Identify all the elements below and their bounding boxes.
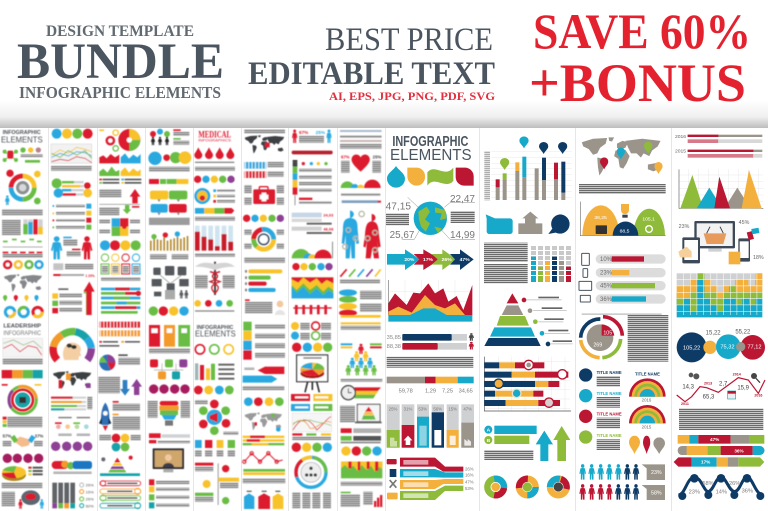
- mini charts bottom: [341, 492, 382, 507]
- heading: infographic elements medium: ELEMENTS: [195, 329, 236, 338]
- ellipse stack: [339, 289, 382, 316]
- humps chart with trophy: 88,5: [620, 228, 630, 234]
- navy wave labels: 26%: [729, 481, 740, 487]
- navy wave labels: 58%: [702, 481, 714, 487]
- handshake: 37%: [35, 434, 43, 439]
- icon: team network: [3, 147, 43, 163]
- mosaic axis: [677, 315, 762, 317]
- navy wave labels: 14%: [716, 490, 727, 496]
- head arc ring: [53, 332, 91, 360]
- icon row: [292, 443, 332, 452]
- bubble values: 105,22: [683, 345, 700, 351]
- clock ring: [244, 229, 285, 263]
- devices with basket: 23%: [679, 224, 690, 230]
- chart: triangles: [679, 169, 763, 208]
- people male and female: [51, 236, 92, 259]
- horizontal bars: [51, 397, 92, 410]
- chart: square grid: [531, 246, 571, 282]
- title block: design template bundle: INFOGRAPHIC ELEMENTS: [19, 83, 221, 102]
- donut row: [5, 307, 42, 317]
- title block: save 60% bonus: [529, 3, 751, 113]
- title block: design template bundle: [17, 23, 224, 102]
- dark columns and rings: 15%: [86, 489, 94, 494]
- column chart: [195, 226, 235, 257]
- icon row magenta: [149, 384, 190, 394]
- pie: third: [550, 479, 567, 495]
- icon row: [292, 343, 332, 352]
- chart: flow bands: 47%: [465, 479, 474, 484]
- chart: flow bands: 53%: [465, 486, 474, 491]
- line chart: [3, 338, 43, 364]
- chart: flow bands: [387, 458, 474, 500]
- section: infographic elements panel upper: [386, 134, 572, 315]
- line chart with years: 14,3: [682, 384, 695, 390]
- chart: six percent columns: 31%: [404, 407, 412, 412]
- title block: best price editable text: AI, EPS, JPG, PNG, PDF, SVG: [329, 91, 495, 103]
- square list: [149, 479, 189, 508]
- rainbow 2015: 2015: [642, 424, 652, 429]
- human bodies: [342, 211, 381, 258]
- flame circle: [194, 188, 235, 204]
- arrows up and down: [99, 189, 140, 215]
- section: left columns lower: [2, 322, 190, 509]
- chart: segmented bar: 7,25: [442, 389, 453, 395]
- title block: save 60% bonus: SAVE 60%: [533, 3, 751, 59]
- percent callouts: [642, 464, 665, 500]
- title list with pins: TITLE NAME: [597, 370, 622, 375]
- globe with values: 47,15: [386, 201, 411, 212]
- line chart with years: 2011: [681, 402, 689, 406]
- year bars 2016 2015: 2015: [675, 149, 686, 155]
- bubble values: 77,12: [747, 345, 761, 351]
- globe with values: 14,99: [450, 230, 475, 241]
- line chart with years: 65,3: [703, 395, 715, 401]
- dark columns and rings: 25%: [86, 483, 94, 488]
- section: right panels upper: [579, 134, 764, 315]
- stat people top: [292, 129, 332, 143]
- progress pills with devices: 10%: [600, 257, 613, 263]
- line chart with years: 2,7: [719, 381, 728, 387]
- stacked spikes: [341, 462, 382, 486]
- line chart with years: 2013: [704, 381, 712, 385]
- section: medical columns upper: [194, 129, 382, 316]
- rainbow 2016: 2016: [642, 398, 652, 403]
- a b bars: A: [487, 428, 491, 434]
- icon row magenta: [3, 454, 43, 463]
- rocket: [99, 401, 140, 431]
- title block: design template bundle: BUNDLE: [17, 34, 224, 90]
- line chart waves: [292, 413, 332, 440]
- section: infographic elements panel lower: [387, 315, 573, 500]
- chart: square progress rows: 35,85: [387, 335, 401, 341]
- chart: segmented bar: 34,65: [459, 389, 473, 395]
- speech head: [2, 490, 44, 509]
- text columns: [292, 492, 331, 508]
- title list with pins: [579, 368, 622, 450]
- chart: square progress rows: 88,38: [387, 344, 401, 350]
- chart: column rows: [150, 231, 188, 259]
- up arrows: [536, 426, 570, 461]
- people bar: [149, 433, 190, 443]
- pictogram rows: 24,03: [323, 213, 334, 218]
- lightbulb: [148, 401, 190, 426]
- bubble values: 75,32: [720, 345, 734, 351]
- icon row: [292, 263, 333, 270]
- progress pills: [52, 178, 92, 198]
- progress pills with devices: 45%: [600, 284, 613, 290]
- stat people top: 25%: [316, 130, 326, 135]
- bubble circles: [148, 151, 191, 172]
- chart: segmented bar: 59,78: [399, 389, 413, 395]
- monitor stat: [53, 263, 95, 278]
- globe with values: [386, 194, 475, 241]
- chart: segmented ring: 105: [603, 330, 612, 336]
- chart: six percent columns: 15%: [448, 407, 457, 412]
- dark columns and rings: 50%: [86, 503, 94, 508]
- heading: infographic elements small: INFOGRAPHIC: [3, 130, 41, 136]
- pie: [103, 354, 140, 367]
- chart: square progress rows: [387, 333, 474, 350]
- chart: six percent columns: [387, 404, 474, 448]
- stacked bar 17%: [674, 457, 764, 467]
- dark columns and rings: 25%: [86, 497, 94, 502]
- dark map: [244, 129, 285, 154]
- pie: first: [487, 479, 504, 495]
- bubble values: 15,22: [706, 330, 721, 336]
- caduceus: [195, 262, 235, 295]
- chart: six percent columns: 47%: [463, 407, 472, 412]
- stacked icon boxes: [243, 322, 285, 360]
- people rows: [99, 322, 140, 347]
- column chart grey: [195, 363, 234, 380]
- humps chart with trophy: [580, 202, 666, 236]
- bar dot lists: [340, 130, 382, 149]
- easel with pie: [297, 355, 328, 392]
- icon row bottom: [149, 306, 189, 316]
- pictogram rows: 48,08: [323, 226, 334, 231]
- chart: segmented ring: [581, 317, 622, 358]
- small caption: [582, 313, 662, 315]
- navy wave labels: [678, 474, 764, 500]
- pie: second: [519, 479, 536, 495]
- title list with pins: TITLE NAME: [597, 391, 622, 396]
- icon: navy speech bubble: [548, 214, 570, 234]
- green yellow band: [243, 469, 285, 483]
- arrow chain: [387, 249, 474, 270]
- business network icons: [152, 266, 189, 299]
- heading: medical: INFOGRAPHICS: [198, 139, 232, 143]
- legend list: [3, 417, 42, 427]
- chart: column pairs with pins: [484, 136, 572, 200]
- title block: save 60% bonus: +BONUS: [529, 53, 746, 113]
- bubble values: [677, 330, 765, 362]
- title list with pins: TITLE NAME: [597, 412, 622, 417]
- node row: [55, 417, 90, 436]
- heading: medical: [198, 130, 232, 143]
- monitor stat: 1 20%: [85, 274, 95, 278]
- people pyramid: [341, 344, 382, 382]
- text block: [2, 209, 43, 215]
- shape: teal drop: [387, 166, 405, 188]
- devices with basket: 18%: [753, 255, 764, 261]
- chart: gantt bars: [484, 357, 571, 411]
- small round icons with text: [291, 322, 331, 340]
- dark columns and rings: [52, 483, 94, 508]
- navy wave labels: 36%: [742, 489, 753, 495]
- pyramid: [100, 456, 140, 476]
- percent callouts: 23%: [651, 470, 662, 476]
- syringe: [293, 160, 332, 205]
- chart: flow bands: 26%: [465, 467, 474, 472]
- arrows teal and purple: [98, 377, 142, 396]
- title block: best price editable text: [248, 22, 495, 103]
- shape: green wave: [427, 168, 453, 186]
- year bars 2016 2015: [675, 134, 762, 158]
- text block: [628, 315, 668, 362]
- globe with values: 25,67: [390, 230, 415, 241]
- text block two paragraphs: [484, 243, 528, 283]
- puzzle: [99, 218, 140, 236]
- chain: [292, 151, 333, 154]
- label tags: [291, 394, 332, 411]
- table with arrow: [52, 282, 95, 315]
- gauges: [195, 345, 233, 354]
- leadership ring: [2, 384, 41, 414]
- pyramid top tiers: [502, 293, 567, 315]
- heading: infographic elements large: ELEMENTS: [390, 147, 472, 164]
- chart: brain ring: [5, 170, 41, 205]
- segmented bar: [149, 179, 188, 184]
- three cards: [149, 325, 190, 353]
- year bars 2016 2015: 2016: [675, 134, 686, 140]
- heading: infographic elements small: ELEMENTS: [1, 134, 43, 144]
- globe with values: 22,47: [450, 194, 475, 205]
- heading: infographic elements large: INFOGRAPHIC: [392, 134, 469, 150]
- chart: mountain area: [388, 280, 472, 315]
- title block: best price editable text: EDITABLE TEXT: [248, 56, 495, 92]
- chart: six percent columns: 56%: [433, 407, 442, 412]
- heading: infographic elements large: [390, 134, 472, 164]
- arrow chain: 17%: [423, 257, 434, 263]
- icon row kit: [243, 215, 284, 222]
- vertical timeline: [195, 463, 239, 505]
- heartbeat people: [293, 305, 332, 314]
- people pictogram: [579, 464, 639, 500]
- four circles: [99, 434, 141, 451]
- icon row: [244, 397, 284, 406]
- flow chart: [150, 359, 187, 379]
- line chart with years: 2014: [733, 373, 742, 377]
- stacked bar 36%: [678, 446, 764, 455]
- humps chart with trophy: 105,1: [642, 217, 655, 223]
- heading: infographic elements medium: [195, 325, 236, 338]
- red network: [243, 452, 283, 463]
- grey map: [245, 413, 282, 432]
- text block: [579, 184, 666, 194]
- map with highlights: [53, 371, 91, 389]
- org ring: [296, 457, 326, 487]
- icon: taupe house: [518, 212, 542, 234]
- icon: teal speech box: [486, 214, 513, 234]
- handshake: 57%: [3, 434, 11, 439]
- title block: best price editable text: BEST PRICE: [325, 22, 493, 58]
- text block: [484, 450, 533, 460]
- header shadow band: [0, 100, 768, 128]
- heart: [341, 155, 381, 173]
- chart: segmented bar: [387, 377, 474, 395]
- progress pills with devices: [579, 253, 666, 304]
- chart: six percent columns: 53%: [418, 407, 427, 412]
- stacked area chart: [292, 277, 333, 298]
- arrow chain: 26%: [442, 257, 452, 263]
- data table: [243, 436, 284, 445]
- stacked bar 47%: [678, 435, 764, 444]
- stacked bar 17%: 17%: [701, 460, 711, 465]
- heart: 25%: [373, 155, 381, 160]
- chart: segmented ring: 269: [593, 342, 602, 348]
- arrow meters: [243, 367, 284, 390]
- percent callouts: 58%: [651, 490, 662, 496]
- monitor: [153, 448, 184, 472]
- outlined cards: [101, 254, 140, 281]
- team bubbles: [150, 129, 189, 145]
- arrow chain: 20%: [404, 257, 415, 263]
- chart: mountain area base: [388, 315, 472, 322]
- shape: red blob: [456, 168, 474, 186]
- rainbow 2016: [629, 371, 666, 403]
- icon strip: [2, 370, 43, 378]
- doctor: [245, 299, 285, 315]
- line chart with years: 15,9: [737, 386, 750, 392]
- line chart with years: 2016: [754, 394, 762, 398]
- line chart with years: [677, 373, 765, 406]
- icon row: [3, 260, 44, 269]
- progress pills with devices: 36%: [600, 297, 613, 303]
- heading: medical: MEDICAL: [198, 130, 231, 140]
- heading: leadership infographic: INFOGRAPHIC: [3, 331, 42, 337]
- speech boxes: [150, 191, 187, 215]
- heading: leadership infographic: [3, 323, 42, 337]
- label rows: [341, 428, 381, 443]
- devices with basket: 45%: [739, 220, 750, 226]
- heading: infographic elements small: [1, 130, 43, 144]
- small cards: [244, 491, 283, 509]
- grey text band: [149, 218, 190, 225]
- pill bars: [245, 269, 282, 292]
- map with pins: [582, 137, 663, 176]
- chart: mosaic heatmap: [677, 273, 762, 315]
- title block: design template bundle: DESIGN TEMPLATE: [46, 23, 194, 40]
- icon row: [194, 386, 234, 394]
- icon row: second column: [52, 129, 93, 139]
- section: medical columns lower: [194, 315, 382, 509]
- section: left columns upper: [1, 129, 191, 317]
- humps: [292, 242, 333, 258]
- humps chart with trophy: 36,25: [594, 215, 607, 221]
- clock bands: [341, 386, 381, 400]
- title list with pins: TITLE NAME: [597, 433, 622, 438]
- 3d pie: [2, 466, 43, 488]
- blood drops: [194, 147, 235, 171]
- diagonal arrows: [340, 269, 381, 283]
- progress pills with devices: 23%: [600, 271, 613, 277]
- humps small: [341, 180, 381, 188]
- first aid kit: [244, 185, 284, 205]
- stat people top: 67%: [299, 130, 309, 135]
- bubble values: 55,22: [735, 330, 751, 336]
- chart: segmented bar: 1,29: [425, 389, 436, 395]
- icon list: [52, 204, 91, 230]
- navy wave labels: 23%: [689, 490, 700, 496]
- chart: coloured columns: [2, 219, 43, 235]
- heading: leadership infographic: LEADERSHIP: [3, 323, 41, 329]
- stacked horizontal bars: [101, 288, 141, 314]
- pipes: [52, 461, 92, 474]
- rainbow 2015: [629, 405, 666, 429]
- a b bars: [484, 426, 537, 444]
- megaphone hub: [195, 400, 238, 435]
- arrow chain: 47%: [460, 257, 470, 263]
- chart: flow bands: 16%: [465, 473, 474, 478]
- a b bars: B: [487, 438, 491, 444]
- text block: [387, 357, 473, 368]
- timeline: [3, 239, 43, 258]
- pyramid lower tiers: [484, 316, 573, 346]
- colour pill: [195, 208, 235, 221]
- laptop pyramid: [340, 404, 382, 423]
- teardrop pins: [629, 436, 665, 454]
- stacked bar 36%: 36%: [734, 448, 745, 453]
- pin row medical: [194, 300, 234, 312]
- range slider: [341, 193, 381, 203]
- icon row purple: [51, 442, 92, 451]
- shape: amber blob: [407, 168, 425, 186]
- stacked bar 47%: 47%: [710, 437, 720, 442]
- chart: six percent columns: 25%: [389, 407, 397, 412]
- people rows blue red: [244, 162, 284, 178]
- heart: 67%: [341, 155, 350, 160]
- icon row: [341, 446, 382, 456]
- handshake: [3, 434, 43, 447]
- area charts: [99, 153, 141, 184]
- outlined list: [100, 481, 141, 509]
- map with pins: [3, 274, 42, 302]
- text block: [679, 408, 763, 430]
- icon row medical: [194, 176, 235, 183]
- section: right panels lower: [579, 315, 765, 500]
- rainbow 2016: TITLE NAME: [635, 371, 660, 376]
- list top: [341, 315, 382, 348]
- icon row third column: [100, 240, 141, 250]
- gear and pie: [99, 129, 140, 151]
- heading: infographic elements medium: INFOGRAPHIC: [197, 325, 233, 331]
- square cards: [195, 440, 235, 457]
- column dividers: [48, 128, 672, 511]
- line chart: [51, 144, 92, 171]
- pictogram rows: [292, 213, 334, 234]
- devices with basket: [678, 220, 764, 264]
